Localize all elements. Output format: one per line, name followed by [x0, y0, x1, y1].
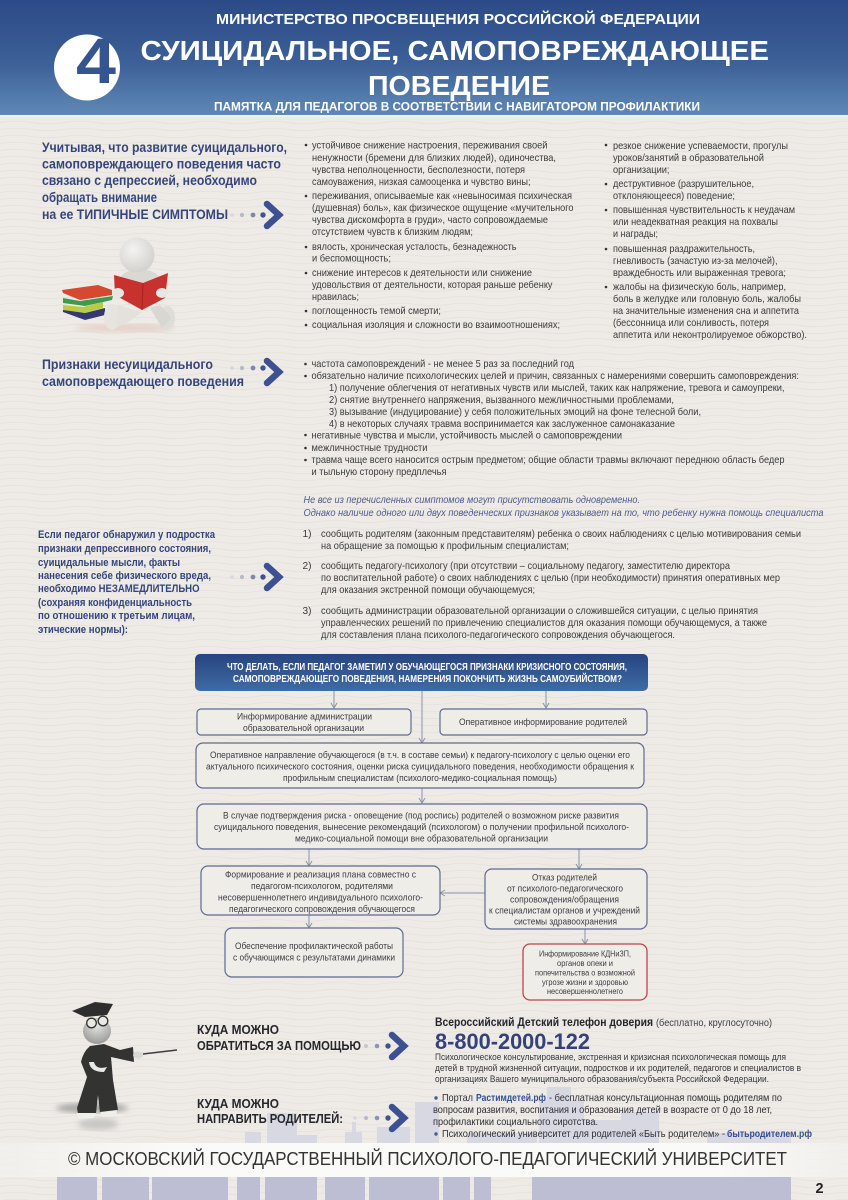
list: self-harm signs: 1) получение облегчения от негативных чувств или мыслей, таких как напряжение, тревога и самоупреки, [329, 382, 784, 394]
column: typical symptoms left: вялость, хроническая усталость, безнадежность [312, 241, 517, 253]
text block: intro about typical symptoms [42, 140, 287, 222]
list: self-harm signs: межличностные трудности [312, 442, 428, 454]
skyline backdrop [57, 1087, 791, 1200]
box: parents refusal [485, 869, 647, 929]
flowchart header: САМОПОВРЕЖДАЮЩЕГО ПОВЕДЕНИЯ, НАМЕРЕНИЯ ПОКОНЧИТЬ ЖИЗНЬ САМОУБИЙСТВОМ? [233, 673, 622, 685]
column: typical symptoms left: удовольствия от деятельности, которая раньше ребенку [312, 279, 553, 291]
list: self-harm signs: и тыльную сторону предплечья [312, 466, 446, 478]
ministry line: МИНИСТЕРСТВО ПРОСВЕЩЕНИЯ РОССИЙСКОЙ ФЕДЕРАЦИИ [216, 10, 700, 28]
column: typical symptoms right: уроков/занятий в образовательной [613, 152, 764, 164]
column: typical symptoms left: самоуважения, низкая самооценка и чувство вины; [312, 176, 530, 188]
box: referral to psychologist: актуального психического состояния, оценки риска суицидального поведения, необходимости обращения к [206, 762, 635, 772]
icon: number 4 badge: 4 [76, 25, 116, 97]
heading: non-suicidal self-harm signs: самоповреждающего поведения [42, 374, 244, 389]
column: typical symptoms right: боль в желудке или головную боль, жалобы [613, 293, 801, 305]
icon: professor with pointer [56, 1002, 177, 1130]
box: risk confirmation [197, 804, 647, 849]
column: typical symptoms right: жалобы на физическую боль, например, [613, 281, 786, 293]
box: inform administration: образовательной организации [243, 723, 364, 734]
box: referral to psychologist: профильным специалистам (психолого-медико-социальная помощь) [283, 773, 557, 784]
label: where to refer parents: КУДА МОЖНО [197, 1096, 279, 1111]
icon: stack of books [62, 285, 113, 320]
box: risk confirmation: медико-социальной помощи вне образовательной организации [295, 834, 548, 844]
box: notify commission (red): попечительства о возможной [535, 968, 635, 978]
column: typical symptoms left: чувства дискомфорта в груди», часто сопровождаемые [312, 214, 548, 226]
box: prevention work [225, 928, 403, 977]
text block: intro about typical symptoms: самоповреждающего поведения часто [42, 156, 281, 172]
column: typical symptoms right: организации; [613, 164, 670, 176]
box: notify commission (red) [523, 944, 647, 1000]
column: typical symptoms right: или неадекватная реакция на похвалы [613, 216, 778, 228]
text block: if the teacher discovered [38, 529, 216, 636]
helpline heading: Всероссийский Детский телефон доверия [435, 1017, 653, 1029]
box: notify commission (red): органов опеки и [557, 959, 613, 968]
column: typical symptoms left: чувства неполноценности, бесполезности, потеря [312, 164, 525, 176]
column: typical symptoms right: деструктивное (разрушительное, [613, 178, 754, 190]
text block: intro about typical symptoms: Учитывая, что развитие суицидального, [42, 140, 287, 155]
box: parents refusal: от психолого-педагогического [507, 884, 623, 894]
helpline description: Психологическое консультирование, экстренная и кризисная психологическая помощь для [435, 1052, 786, 1063]
column: typical symptoms right: враждебность или выраженная тревога; [613, 267, 786, 279]
column: typical symptoms left: снижение интересов к деятельности или снижение [312, 267, 532, 279]
gown [77, 1044, 134, 1114]
portal list: бытьродителем.рф [727, 1128, 812, 1140]
column: typical symptoms right: на значительные изменения сна и аппетита [613, 305, 799, 317]
list: teacher steps: на обращение за помощью к профильным специалистам; [321, 540, 569, 552]
list: teacher steps [302, 528, 801, 641]
box: prevention work: Обеспечение профилактической работы [235, 941, 393, 952]
icon: figure reading a book [62, 238, 175, 332]
box: notify commission (red): несовершеннолетнего [547, 987, 624, 996]
box: referral to psychologist [196, 743, 644, 788]
column: typical symptoms right [605, 140, 807, 341]
flowchart [195, 654, 648, 1000]
helpline description: детей в трудной жизненной ситуации, подростков и их родителей, педагогов и специалистов в [435, 1063, 801, 1074]
text block: if the teacher discovered: по отношению к третьим лицам, [38, 610, 195, 622]
column: typical symptoms right: отклоняющееся) поведение; [613, 190, 735, 202]
list: self-harm signs: 3) вызывание (индуцирование) у себя положительных эмоций на фоне телесной боли, [329, 406, 701, 418]
title [140, 35, 769, 101]
header banner [0, 0, 848, 117]
list: teacher steps: 2) [302, 560, 312, 572]
arrow: self-harm signs [230, 361, 279, 383]
footer band with copyright: © МОСКОВСКИЙ ГОСУДАРСТВЕННЫЙ ПСИХОЛОГО-ПЕДАГОГИЧЕСКИЙ УНИВЕРСИТЕТ [68, 1148, 787, 1169]
helpline panel [433, 1017, 812, 1140]
portal list: профилактики социального сиротства. [433, 1116, 598, 1128]
box: support plan: несовершеннолетнего индивидуального психолого- [218, 892, 423, 904]
box: parents refusal: к специалистам органов и учреждений [489, 906, 640, 916]
text block: if the teacher discovered: суицидальные мысли, факты [38, 557, 180, 569]
subtitle: ПАМЯТКА ДЛЯ ПЕДАГОГОВ В СООТВЕТСТВИИ С НАВИГАТОРОМ ПРОФИЛАКТИКИ [214, 102, 700, 114]
label: where to refer parents: НАПРАВИТЬ РОДИТЕЛЕЙ: [197, 1111, 343, 1126]
box: inform parents: Оперативное информирование родителей [459, 717, 627, 728]
list: teacher steps: сообщить администрации образовательной организации о сложившейся ситуации, с целью принятия [321, 605, 758, 617]
box: referral to psychologist: Оперативное направление обучающегося (в т.ч. в составе семьи) к педагогу-психологу с целью оценки его [210, 750, 630, 761]
title: ПОВЕДЕНИЕ [368, 70, 550, 101]
list: teacher steps: по воспитательной работе) о своих наблюдениях с целью (при необходимости) принятия оперативных мер [321, 572, 780, 584]
portal list [433, 1092, 812, 1140]
footer band with copyright [0, 1143, 848, 1177]
box: support plan: педагогом-психологом, родителями [251, 881, 393, 892]
box: notify commission (red): угрозе жизни и здоровью [542, 978, 628, 987]
arrow: symptoms [230, 204, 279, 226]
column: typical symptoms left [305, 140, 574, 331]
list: teacher steps: сообщить педагогу-психологу (при отсутствии – социальному педагогу, заместителю директора [321, 560, 730, 572]
title: СУИЦИДАЛЬНОЕ, САМОПОВРЕЖДАЮЩЕЕ [140, 35, 769, 66]
list: teacher steps: для составления плана психолого-педагогического сопровождения обучающегося. [321, 629, 675, 641]
column: typical symptoms left: ненужности (бремени для близких людей), одиночества, [312, 152, 556, 164]
arrow: parents [353, 1107, 404, 1129]
portal list: - бесплатная консультационная помощь родителям по [549, 1092, 782, 1104]
portal list: вопросам развития, воспитания и образования детей в возрасте от 0 до 18 лет, [433, 1104, 772, 1116]
list: self-harm signs: травма чаще всего наносится острым предметом; общие области травмы включают переднюю область бедер [312, 454, 785, 466]
column: typical symptoms right: повышенная чувствительность к неудачам [613, 204, 795, 216]
box: parents refusal: Отказ родителей [532, 872, 597, 884]
list: teacher steps: 1) [302, 528, 312, 540]
flowchart header: ЧТО ДЕЛАТЬ, ЕСЛИ ПЕДАГОГ ЗАМЕТИЛ У ОБУЧАЮЩЕГОСЯ ПРИЗНАКИ КРИЗИСНОГО СОСТОЯНИЯ, [227, 662, 627, 673]
column: typical symptoms left: устойчивое снижение настроения, переживания своей [312, 140, 548, 152]
box: prevention work: с обучающимся с результатами динамики [233, 952, 395, 964]
page number: 2 [816, 1181, 824, 1197]
box: support plan: Формирование и реализация плана совместно с [225, 870, 416, 880]
label: where to refer parents [197, 1096, 343, 1126]
flowchart arrows [306, 691, 588, 944]
box: inform parents [440, 709, 647, 735]
phone number: 8-800-2000-122 [435, 1029, 590, 1054]
text block: if the teacher discovered: необходимо НЕЗАМЕДЛИТЕЛЬНО [38, 583, 200, 595]
heading: non-suicidal self-harm signs: Признаки несуицидального [42, 357, 213, 372]
helpline description: организациях Вашего муниципального образования/субъекта Российской Федерации. [435, 1074, 769, 1085]
column: typical symptoms left: (душевная) боль», как физическое ощущение «мучительного [312, 202, 574, 214]
list: teacher steps: для оказания экстренной помощи обучающемуся; [321, 584, 535, 596]
list: self-harm signs: 2) снятие внутреннего напряжения, вызванного межличностными проблемами, [329, 394, 674, 406]
box: support plan: педагогического сопровождения обучающегося [229, 904, 415, 915]
cap [72, 1002, 113, 1017]
arrow: teacher steps [230, 566, 279, 588]
pointer [143, 1050, 177, 1054]
note: italic remark: Не все из перечисленных симптомов могут присутствовать одновременно. [304, 494, 640, 506]
column: typical symptoms right: (бессонница или сонливость, потеря [613, 317, 769, 329]
text block: if the teacher discovered: этические нормы): [38, 624, 128, 636]
column: typical symptoms left: нравилась; [312, 291, 359, 303]
box: inform administration [197, 709, 411, 735]
flowchart header [195, 654, 648, 691]
head [83, 1018, 111, 1044]
box: inform administration: Информирование администрации [237, 712, 372, 722]
column: typical symptoms left: социальная изоляция и сложности во взаимоотношениях; [312, 319, 560, 331]
list: self-harm signs [304, 358, 799, 478]
helpline heading: (бесплатно, круглосуточно) [656, 1017, 772, 1029]
list: teacher steps: 3) [302, 605, 312, 617]
box: support plan [201, 866, 440, 915]
box: risk confirmation: суицидального поведения, вынесение рекомендаций (психологом) о получении профильной психолого- [214, 822, 629, 833]
label: where to get help [197, 1022, 361, 1053]
label: where to get help: ОБРАТИТЬСЯ ЗА ПОМОЩЬЮ [197, 1038, 361, 1053]
label: where to get help: КУДА МОЖНО [197, 1022, 279, 1037]
box: parents refusal: сопровождения/обращения [510, 894, 619, 906]
helpline description [435, 1052, 801, 1085]
icon: number 4 badge [54, 25, 120, 100]
text block: intro about typical symptoms: связано с депрессией, необходимо [42, 173, 257, 188]
text block: if the teacher discovered: нанесения себе физического вреда, [38, 570, 211, 582]
glasses [87, 1016, 108, 1028]
text block: if the teacher discovered: (сохраняя конфиденциальность [38, 597, 192, 609]
box: parents refusal: системы здравоохранения [514, 916, 617, 928]
text block: intro about typical symptoms: обращать внимание [42, 190, 157, 205]
text block: if the teacher discovered: признаки депрессивного состояния, [38, 543, 211, 555]
portal list: Растимдетей.рф [476, 1092, 546, 1104]
text block: if the teacher discovered: Если педагог обнаружил у подростка [38, 529, 216, 541]
column: typical symptoms right: и награды; [613, 228, 658, 240]
box: risk confirmation: В случае подтверждения риска - оповещение (под роспись) родителей о возможном риске развития [223, 810, 619, 822]
column: typical symptoms right: аппетита или неконтролируемое обжорство). [613, 329, 807, 341]
column: typical symptoms left: и беспомощность; [312, 252, 391, 264]
heading: non-suicidal self-harm signs [42, 357, 244, 389]
note: italic remark [304, 494, 824, 519]
portal list: Психологический университет для родителей «Быть родителем» - [442, 1129, 725, 1140]
column: typical symptoms left: поглощенность темой смерти; [312, 305, 441, 317]
portal list: Портал [442, 1093, 473, 1104]
text block: intro about typical symptoms: на ее ТИПИЧНЫЕ СИМПТОМЫ [42, 207, 228, 222]
list: self-harm signs: частота самоповреждений - не менее 5 раз за последний год [312, 358, 574, 370]
box: notify commission (red): Информирование КДНиЗП, [539, 950, 631, 958]
list: self-harm signs: 4) в некоторых случаях травма воспринимается как заслуженное самонаказание [329, 418, 675, 430]
column: typical symptoms right: резкое снижение успеваемости, прогулы [613, 140, 788, 152]
column: typical symptoms right: повышенная раздражительность, [613, 243, 755, 255]
column: typical symptoms right: гневливость (зачастую из-за мелочей), [613, 255, 778, 267]
arrow: help [364, 1035, 404, 1057]
list: self-harm signs: негативные чувства и мысли, устойчивость мыслей о самоповреждении [312, 430, 622, 442]
list: teacher steps: управленческих решений по привлечению специалистов для оказания помощи обучающемуся, а также [321, 617, 767, 629]
column: typical symptoms left: отсутствием чувств к близким людям; [312, 226, 473, 238]
column: typical symptoms left: переживания, описываемые как «невыносимая психическая [312, 190, 572, 202]
